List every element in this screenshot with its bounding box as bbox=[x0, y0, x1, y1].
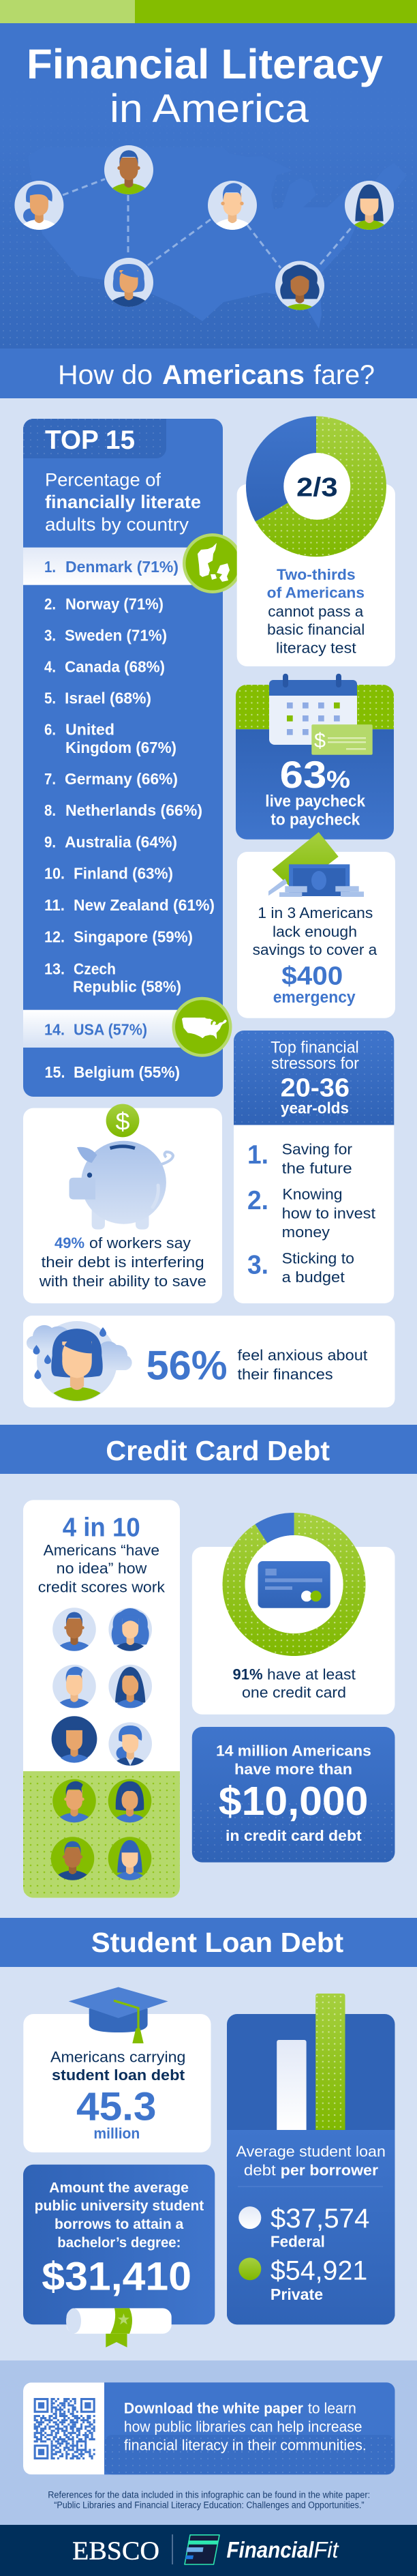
legend: federal: $37,574 bbox=[271, 2204, 369, 2234]
legend: federal bbox=[238, 2204, 369, 2250]
country list rows 2 to 13: 6. bbox=[44, 720, 56, 738]
stressors heading: stressors for bbox=[271, 1054, 359, 1073]
text: 91% have at least one credit card bbox=[233, 1666, 356, 1701]
section heading: How do Americans fare: How do bbox=[58, 360, 153, 390]
text: 91% have at least one credit card: one credit card bbox=[242, 1684, 346, 1701]
panel: 4 in 10 credit scores bbox=[23, 1500, 180, 1898]
text: 45.3 million: 45.3 bbox=[76, 2084, 157, 2129]
text: amount borrowed: $31,410 bbox=[42, 2255, 191, 2298]
text: 1 in 3 lack savings: 1 in 3 Americans bbox=[258, 904, 373, 921]
text: 4 in 10 statement: Americans “have bbox=[44, 1541, 159, 1559]
logo: FinancialFit wordmark: Financial bbox=[226, 2537, 314, 2562]
avatar: woman with long straight hair bbox=[345, 181, 394, 230]
list item 3: Sticking to bbox=[282, 1249, 354, 1267]
tab: top 15 bbox=[23, 419, 166, 458]
panel subtitle: Percentage of bbox=[45, 470, 161, 490]
icon: dollar coin bbox=[106, 1104, 139, 1137]
list item 3 bbox=[247, 1249, 354, 1286]
country list rows 2 to 13: 8. bbox=[44, 801, 56, 819]
panel: $400 emergency bbox=[237, 832, 395, 1018]
donut chart: 2/3 bbox=[246, 416, 386, 557]
list item 2 bbox=[247, 1186, 375, 1241]
text: 63% live paycheck to paycheck bbox=[265, 753, 366, 829]
text: 91% have at least one credit card: have at least bbox=[267, 1666, 356, 1683]
country list rows 2 to 13: 7. bbox=[44, 770, 56, 788]
text: amount borrowed: bachelor’s degree: bbox=[57, 2235, 181, 2251]
text: amount borrowed: public university student bbox=[35, 2198, 204, 2214]
legend: private bbox=[238, 2256, 367, 2303]
country list rows 2 to 13: Norway (71%) bbox=[65, 595, 164, 612]
country list rows 2 to 13: 11. bbox=[44, 896, 65, 914]
section heading: How do Americans fare: fare? bbox=[313, 360, 375, 390]
icon: paycheck: $ bbox=[314, 728, 326, 752]
row 1: Denmark highlight bbox=[23, 548, 207, 585]
country list rows 2 to 13: Netherlands (66%) bbox=[65, 801, 202, 819]
avatar: woman with ponytail bbox=[14, 181, 64, 230]
list item 1 bbox=[247, 1140, 352, 1176]
donut chart: 91% bbox=[223, 1513, 366, 1656]
text: average debt heading bbox=[236, 2143, 386, 2178]
list item 2: how to invest bbox=[282, 1204, 375, 1222]
legend: private: Private bbox=[271, 2285, 323, 2303]
stressors heading bbox=[271, 1038, 359, 1116]
country list rows 2 to 13: 13. bbox=[44, 960, 65, 977]
country list rows 2 to 13: Australia (64%) bbox=[65, 833, 177, 850]
panel subtitle: financially literate bbox=[45, 492, 201, 512]
text: download the white paper: financial literacy in their communities. bbox=[124, 2437, 367, 2454]
top colour bar bbox=[0, 0, 417, 23]
references text: References for the data included in this infographic can be found in the white paper: bbox=[48, 2490, 370, 2500]
bar chart: federal vs private bbox=[277, 1994, 345, 2130]
row 15: Belgium: Belgium (55%) bbox=[74, 1063, 180, 1081]
legend: private: $54,921 bbox=[271, 2256, 367, 2286]
country list rows 2 to 13: 2. bbox=[44, 595, 56, 612]
list item 3: a budget bbox=[282, 1269, 345, 1286]
country list rows 2 to 13: 3. bbox=[44, 626, 56, 644]
panel: $10,000 credit card debt: in credit card debt bbox=[226, 1827, 362, 1844]
country list rows 2 to 13: United bbox=[65, 720, 114, 738]
panel subtitle bbox=[45, 470, 201, 535]
country list rows 2 to 13 bbox=[44, 595, 215, 995]
title: Financial Literacy bbox=[27, 41, 383, 87]
country list rows 2 to 13: Czech bbox=[74, 960, 116, 977]
list item 1: 1. bbox=[247, 1140, 268, 1170]
section heading: How do Americans fare: Americans bbox=[162, 360, 305, 390]
country list rows 2 to 13: 9. bbox=[44, 833, 56, 850]
row 14: USA highlight bbox=[23, 1010, 207, 1048]
dashed connecting lines bbox=[63, 179, 352, 268]
text: average debt heading: Average student loan bbox=[236, 2143, 386, 2160]
text: 63% live paycheck to paycheck: 63 bbox=[280, 753, 326, 796]
icon: piggy bank bbox=[70, 1141, 173, 1230]
title bbox=[27, 41, 383, 131]
text: 4 in 10 statement bbox=[38, 1513, 166, 1596]
text: two-thirds statement: Two-thirds bbox=[277, 566, 356, 583]
panel: two-thirds fail test bbox=[237, 416, 395, 666]
list item 3: 3. bbox=[247, 1251, 268, 1280]
text: 1 in 3 lack savings bbox=[253, 904, 377, 1007]
title: in America bbox=[110, 87, 309, 131]
avatar: man with spiky hair bbox=[208, 181, 257, 230]
text: 56% feel anxious about their finances: their finances bbox=[237, 1366, 333, 1383]
text: two-thirds statement bbox=[267, 566, 365, 657]
list item 1: the future bbox=[282, 1159, 352, 1176]
text: 1 in 3 lack savings: $400 bbox=[281, 962, 343, 990]
icon: banknotes and coins bbox=[268, 832, 364, 897]
text: 45.3 million bbox=[50, 2048, 185, 2142]
panel subtitle: adults by country bbox=[45, 514, 189, 535]
text: 4 in 10 statement: no idea” how bbox=[57, 1560, 147, 1577]
icon: anxious woman with rain clouds bbox=[27, 1321, 132, 1402]
text: 45.3 million: million bbox=[93, 2125, 140, 2142]
icon: Denmark map badge bbox=[183, 533, 243, 593]
panel: $10,000 credit card debt: have more than bbox=[234, 1760, 352, 1777]
map of the United States bbox=[28, 147, 407, 329]
text: 1 in 3 lack savings: savings to cover a bbox=[253, 941, 377, 958]
logo: FinancialFit wordmark: Fit bbox=[313, 2537, 339, 2562]
text: download the white paper: how public libraries can help increase bbox=[124, 2418, 362, 2436]
stressors heading: 20-36 bbox=[281, 1074, 350, 1102]
hero panel bbox=[0, 23, 417, 349]
text: 56% feel anxious about their finances bbox=[146, 1343, 367, 1389]
text: 4 in 10 statement: credit scores work bbox=[38, 1579, 166, 1596]
section heading: Student Loan Debt: Student Loan Debt bbox=[91, 1927, 344, 1958]
text: 63% live paycheck to paycheck: live paycheck bbox=[265, 792, 366, 810]
donut chart: 2/3: 2/3 bbox=[296, 473, 338, 502]
logo: EBSCO: EBSCO bbox=[72, 2537, 159, 2566]
panel: Americans carrying student loan debt bbox=[23, 1987, 211, 2152]
section heading: Credit Card Debt bbox=[0, 1425, 417, 1474]
text: 91% have at least one credit card: 91% bbox=[233, 1666, 263, 1683]
country list rows 2 to 13: Republic (58%) bbox=[73, 977, 181, 995]
panel: download call to action bbox=[23, 2382, 395, 2474]
country list rows 2 to 13: Canada (68%) bbox=[65, 658, 165, 676]
text: two-thirds statement: cannot pass a bbox=[268, 603, 364, 620]
country list rows 2 to 13: 4. bbox=[44, 658, 56, 676]
avatar: woman with bob bbox=[104, 258, 153, 307]
country list rows 2 to 13: New Zealand (61%) bbox=[74, 896, 215, 914]
text: two-thirds statement: literacy test bbox=[276, 640, 356, 657]
text: 49% of workers: their debt is interfering bbox=[41, 1254, 204, 1271]
legend: federal: Federal bbox=[271, 2232, 325, 2250]
text: 63% live paycheck to paycheck: % bbox=[326, 767, 350, 793]
panel: $10,000 credit card debt bbox=[192, 1727, 395, 1863]
stressors heading: Top financial bbox=[271, 1038, 359, 1056]
icon: paycheck bbox=[311, 724, 373, 755]
list item 2: 2. bbox=[247, 1186, 268, 1215]
text: download the white paper: Download the white paper bbox=[124, 2399, 303, 2416]
row 1: Denmark highlight: Denmark (71%) bbox=[65, 558, 179, 576]
country list rows 2 to 13: Singapore (59%) bbox=[74, 928, 193, 946]
panel: top 15 countries bbox=[23, 419, 243, 1097]
text: 1 in 3 lack savings: emergency bbox=[273, 988, 356, 1007]
text: 49% of workers bbox=[39, 1234, 206, 1290]
QR code bbox=[34, 2399, 95, 2459]
avatar: woman with curly hair bbox=[275, 261, 324, 310]
country list rows 2 to 13: Sweden (71%) bbox=[65, 626, 167, 644]
avatar: man with short hair bbox=[104, 145, 153, 194]
text: average debt heading: per borrower bbox=[281, 2162, 378, 2178]
text: 45.3 million: Americans carrying bbox=[50, 2048, 185, 2065]
country list rows 2 to 13: Germany (66%) bbox=[65, 770, 178, 788]
text: amount borrowed: Amount the average bbox=[49, 2180, 189, 2195]
stressors heading: year-olds bbox=[281, 1099, 349, 1116]
text: 56% feel anxious about their finances: 56% bbox=[146, 1343, 228, 1389]
avatar grid: ten people bbox=[51, 1608, 152, 1897]
row 15: Belgium: 15. bbox=[45, 1063, 65, 1081]
panel: piggy bank debt bbox=[23, 1104, 222, 1303]
text: 45.3 million: student loan debt bbox=[52, 2067, 185, 2084]
text: 49% of workers: with their ability to save bbox=[39, 1273, 206, 1290]
row 14: USA highlight: 14. bbox=[44, 1021, 65, 1039]
text: 4 in 10 statement: 4 in 10 bbox=[63, 1513, 140, 1542]
icon: credit card bbox=[258, 1561, 330, 1608]
country list rows 2 to 13: 12. bbox=[44, 928, 65, 946]
text: amount borrowed: borrows to attain a bbox=[55, 2217, 184, 2232]
panel: top financial stressors bbox=[234, 1031, 394, 1303]
text: average debt heading: debt bbox=[244, 2162, 276, 2178]
panel: 56% feel anxious bbox=[23, 1316, 395, 1408]
text: 1 in 3 lack savings: lack enough bbox=[273, 923, 357, 940]
country list rows 2 to 13: Israel (68%) bbox=[65, 690, 151, 707]
icon: diploma scroll bbox=[66, 2308, 172, 2348]
text: 63% live paycheck to paycheck: to paycheck bbox=[271, 810, 360, 829]
text: two-thirds statement: basic financial bbox=[267, 621, 365, 638]
text: download the white paper bbox=[124, 2399, 367, 2454]
panel: $10,000 credit card debt: $10,000 bbox=[219, 1779, 368, 1824]
list item 1: Saving for bbox=[282, 1140, 352, 1157]
country list rows 2 to 13: 10. bbox=[44, 864, 65, 882]
icon: USA map badge bbox=[172, 997, 232, 1057]
tab: top 15: TOP 15 bbox=[45, 426, 135, 455]
text: amount borrowed bbox=[35, 2180, 204, 2298]
country list rows 2 to 13: 5. bbox=[44, 690, 56, 707]
references text: “Public Libraries and Financial Literacy Education: Challenges and Opportunities.” bbox=[54, 2500, 365, 2511]
footer background bbox=[0, 2360, 417, 2525]
icon: graduation cap bbox=[69, 1987, 168, 2043]
panel: 63% paycheck to paycheck bbox=[236, 674, 394, 840]
text: 49% of workers: of workers say bbox=[89, 1234, 191, 1252]
text: 49% of workers: 49% bbox=[55, 1234, 84, 1252]
list item 2: money bbox=[282, 1224, 330, 1241]
country list rows 2 to 13: Kingdom (67%) bbox=[65, 739, 176, 756]
icon: calendar bbox=[269, 674, 357, 745]
section heading: How do Americans fare bbox=[0, 349, 417, 398]
section heading: Student Loan Debt bbox=[0, 1918, 417, 1967]
text: download the white paper: to learn bbox=[308, 2399, 356, 2416]
panel: 91% have a credit card bbox=[192, 1513, 395, 1715]
references text bbox=[48, 2490, 370, 2511]
text: two-thirds statement: of Americans bbox=[267, 584, 365, 602]
text: 56% feel anxious about their finances: feel anxious about bbox=[237, 1347, 367, 1364]
panel: average debt per borrower bbox=[227, 1994, 395, 2324]
country list rows 2 to 13: Finland (63%) bbox=[74, 864, 173, 882]
row 14: USA highlight: USA (57%) bbox=[74, 1021, 147, 1039]
row 1: Denmark highlight: 1. bbox=[44, 558, 56, 576]
panel: average public university borrowing bbox=[23, 2165, 215, 2348]
section heading: Credit Card Debt: Credit Card Debt bbox=[106, 1435, 330, 1466]
footer logo bar bbox=[0, 2525, 417, 2576]
list item 2: Knowing bbox=[282, 1186, 343, 1203]
panel: $10,000 credit card debt: 14 million Americans bbox=[216, 1742, 371, 1760]
icon: dollar coin: $ bbox=[116, 1108, 129, 1135]
logo: FinancialFit mark bbox=[185, 2535, 219, 2564]
